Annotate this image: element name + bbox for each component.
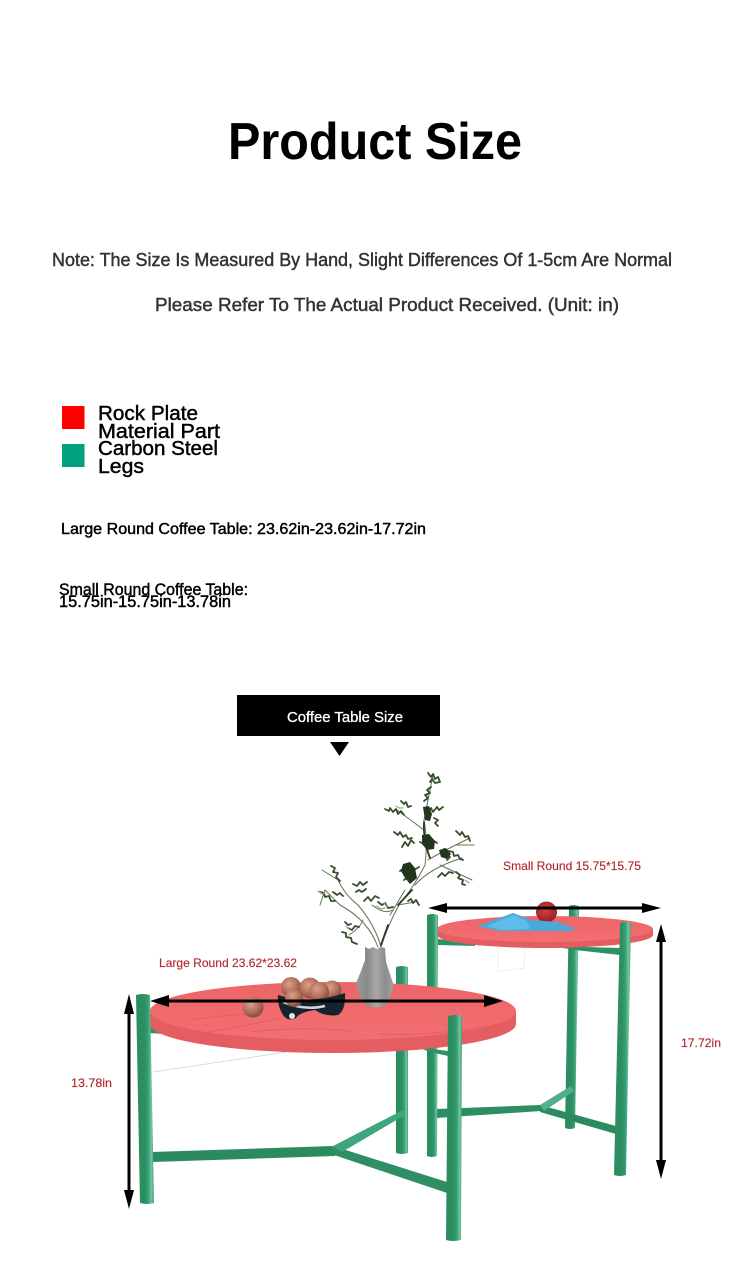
arrow: large width [150,995,503,1007]
banner: coffee table size [237,695,440,756]
dense leaf clusters [401,806,451,884]
large table top [150,982,516,1053]
small table dimensions text: 15.75in-15.75in-13.78in [59,593,231,611]
vase [356,947,393,1008]
note text [52,250,672,315]
large table right leg [446,1015,462,1241]
legend label: carbon steel [98,437,218,478]
legend swatch: rock plate [62,406,84,429]
small table dimensions text: Small Round Coffee Table: [59,581,248,599]
fruit bowl [278,977,345,1019]
large table base bars [148,1026,448,1193]
small table base bars [436,939,620,1134]
small table dimensions text [59,581,248,611]
label: large round size: Large Round 23.62*23.62 [159,956,297,970]
legend [62,402,220,478]
legend label: rock plate: Material Part [98,420,220,443]
label: height small: 13.78in [71,1076,112,1090]
plant [318,773,474,947]
legend swatch: carbon steel [62,444,84,467]
legend label: rock plate: Rock Plate [98,402,198,425]
blue book [477,913,574,931]
pale leaf specks [318,806,469,929]
plant stems [320,775,474,947]
small table right leg [614,922,631,1176]
arrow: small width [428,903,661,913]
large table dimensions text: Large Round Coffee Table: 23.62in-23.62in-17.72in [61,521,426,538]
note text: Note: The Size Is Measured By Hand, Slight Differences Of 1-5cm Are Normal [52,250,672,270]
small table [427,902,653,1176]
marble veins [192,1015,498,1034]
legend label: carbon steel: Legs [98,455,144,478]
arrow: small height [656,924,666,1179]
note text: Please Refer To The Actual Product Received. (Unit: in) [155,295,619,315]
single fruit [242,996,264,1018]
small table back leg [565,905,579,1129]
large table left leg [136,994,154,1204]
faint ghost shape [498,948,525,972]
label: height large: 17.72in [681,1036,721,1050]
small table left leg [427,914,438,1157]
red glass ball [536,902,557,922]
dark main stems [381,822,430,945]
legend label: carbon steel: Carbon Steel [98,437,218,460]
plant leaves [320,773,470,944]
legend label: rock plate [98,402,220,443]
arrow: large height [124,994,134,1209]
title: Product Size [228,113,522,171]
small table top [437,916,653,948]
label: small round size: Small Round 15.75*15.75 [503,859,641,873]
banner: coffee table size: Coffee Table Size [287,710,403,726]
large table back leg [396,966,408,1154]
faint cable line [153,1052,287,1072]
